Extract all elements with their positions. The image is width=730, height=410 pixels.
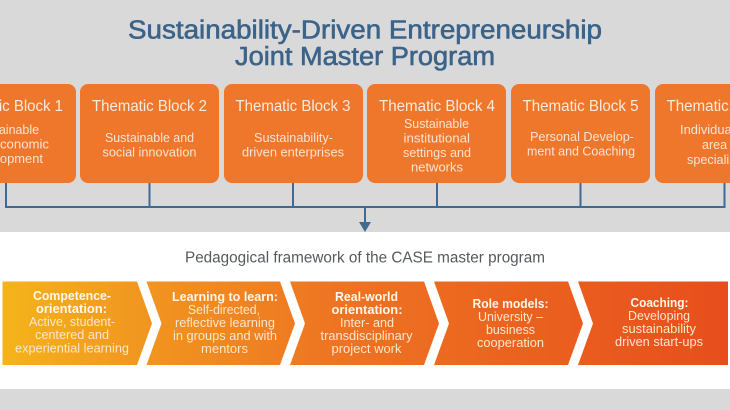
chevron: role models (434, 282, 583, 365)
arrow: down to framework (359, 207, 371, 232)
chevron: competence-orientation: centered and (35, 328, 109, 342)
panel: thematic block 2: social innovation (102, 146, 197, 160)
panel: thematic block 3: Sustainability- (254, 131, 333, 145)
chevron: learning to learn: in groups and with (173, 329, 277, 343)
chevron: real-world orientation: Real-world (335, 290, 398, 304)
chevron: coaching: Developing (628, 309, 690, 323)
panel: thematic block 5: ment and Coaching (527, 144, 635, 158)
panel: thematic block 2: Sustainable and (105, 131, 194, 145)
chevron: learning to learn: reflective learning (175, 316, 275, 330)
chevron: coaching: sustainability (622, 322, 697, 336)
panel: thematic block 3: Thematic Block 3 (236, 98, 351, 115)
chevron: competence-orientation: Competence- (33, 289, 111, 303)
heading: pedagogical framework: Pedagogical framework of the CASE master program (185, 250, 545, 266)
chevron: learning to learn: Learning to learn: (172, 290, 278, 304)
panel: thematic block 4 (367, 84, 506, 183)
chevron: real-world orientation: Inter- and (340, 316, 394, 330)
chevron: role models: University – (478, 310, 543, 324)
chevron: coaching (578, 282, 728, 365)
chevron: competence-orientation: Active, student- (29, 315, 115, 329)
panel: thematic block 2: Thematic Block 2 (92, 98, 207, 115)
panel: thematic block 6 (655, 84, 730, 183)
chevron: learning to learn (146, 282, 295, 365)
title: Joint Master Program (235, 43, 495, 71)
connector lines from blocks (6, 183, 724, 207)
chevron: learning to learn: mentors (201, 342, 248, 356)
panel: thematic block 2 (80, 84, 219, 183)
panel: white framework band (0, 232, 730, 389)
chevron: real-world orientation: orientation: (332, 303, 402, 317)
panel: thematic block 5: Thematic Block 5 (522, 98, 639, 115)
chevron: role models: business (486, 323, 535, 337)
panel: thematic block 1 (0, 84, 76, 183)
chevron: real-world orientation: project work (332, 342, 402, 356)
panel: thematic block 4: Thematic Block 4 (379, 98, 495, 115)
chevron: competence-orientation: experiential learning (15, 342, 129, 356)
title (128, 16, 602, 71)
panel: thematic block 3: driven enterprises (242, 146, 344, 160)
chevron: coaching: driven start-ups (615, 335, 703, 349)
chevron: learning to learn: Self-directed, (188, 303, 260, 317)
panel: thematic block 4: institutional (404, 132, 470, 146)
panel: thematic block 3 (224, 84, 363, 183)
panel: thematic block 5 (511, 84, 650, 183)
chevron: real-world orientation: transdisciplinary (320, 329, 413, 343)
chevron: role models: cooperation (477, 336, 544, 350)
panel: thematic block 5: Personal Develop- (530, 130, 634, 144)
panel: thematic block 4: Sustainable (404, 117, 469, 131)
title: Sustainability-Driven Entrepreneurship (128, 16, 602, 44)
panel: thematic block 4: settings and (403, 146, 471, 160)
chevron: competence-orientation (2, 282, 152, 365)
chevron: role models: Role models: (472, 297, 548, 311)
chevron: coaching: Coaching: (630, 296, 688, 310)
chevron: competence-orientation: orientation: (36, 302, 107, 316)
panel: thematic block 4: networks (411, 160, 463, 174)
chevron: real-world orientation (290, 282, 439, 365)
